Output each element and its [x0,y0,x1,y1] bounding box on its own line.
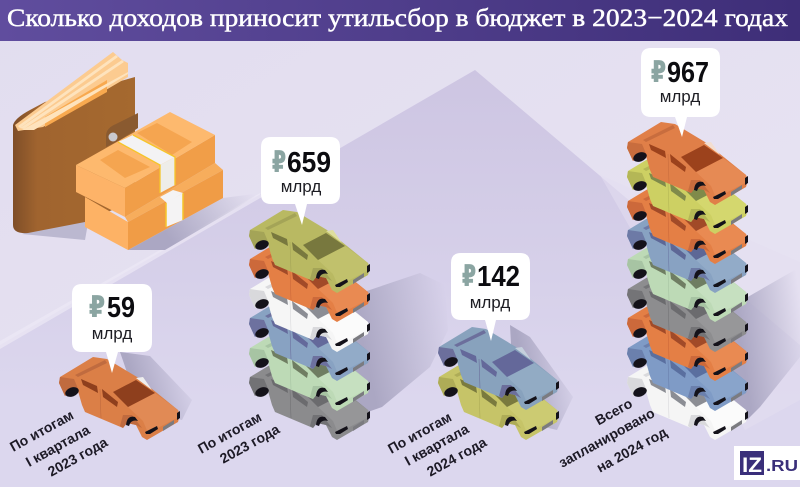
label: I quarter 2023: 2023 года [45,434,110,480]
car white [249,269,370,352]
car stack: 2023 [249,210,370,440]
label: I quarter 2023 [7,407,110,480]
label: I quarter 2023: I квартала [23,421,93,470]
icon: wallet and cash [13,52,262,250]
car orange [627,122,748,205]
callout: 967: 967 [667,57,709,89]
top cash stack [76,165,125,217]
callout: 967 [641,48,720,137]
car yellow [627,151,748,234]
label: planned 2024: на 2024 год [594,424,670,476]
label: I quarter 2024: 2024 года [424,434,489,480]
callout: 659: 659 [287,147,331,179]
wallet clasp [106,113,138,147]
car blue [627,328,748,411]
label: I quarter 2023: По итогам [7,407,76,455]
callout: 142: ₽ [462,261,476,293]
car stack: I quarter 2024 [438,327,559,440]
callout: 659 [261,137,340,225]
logo: IZ.RU [734,446,800,480]
car gray [627,269,748,352]
car green [249,328,370,411]
callout: 659: млрд [281,177,321,196]
title: Сколько доходов приносит утильсбор в бюджет в 2023−2024 годах [7,5,789,32]
car blue [249,298,370,381]
wallet body [13,77,135,233]
car olive [438,357,559,440]
title bar [0,0,800,41]
callout: 59 [72,284,152,373]
label: planned 2024: Всего [592,395,635,428]
car white [627,357,748,440]
bottom cash stack [125,163,223,222]
car stack: planned 2024 [627,122,748,440]
logo: IZ.RU: .RU [766,458,798,475]
car blue [627,210,748,293]
shadows [120,267,800,430]
car olive [249,210,370,293]
label: planned 2024: запланировано [556,405,657,471]
callout: 142: 142 [477,261,520,293]
callout: 142 [451,253,530,341]
callout: 967: ₽ [651,57,666,89]
callout: 659: ₽ [272,147,286,179]
car orange [627,181,748,264]
car stack: I quarter 2023 [59,357,180,440]
label: I quarter 2024: I квартала [402,420,472,469]
label: 2023: По итогам [195,409,264,457]
car blue [438,327,559,410]
label: 2023 [195,409,282,467]
callout: 967: млрд [660,87,700,106]
car orange [249,239,370,322]
label: 2023: 2023 года [217,421,282,467]
callout: 142: млрд [470,293,510,312]
paper band [118,135,175,165]
car orange [627,298,748,381]
callout: 59: млрд [92,324,132,343]
label: I quarter 2024 [385,409,489,480]
logo: IZ.RU: IZ [742,454,762,477]
car gray [249,357,370,440]
callout: 59: 59 [107,292,135,324]
car green [627,239,748,322]
label: I quarter 2024: По итогам [385,409,454,457]
callout: 59: ₽ [89,292,105,324]
